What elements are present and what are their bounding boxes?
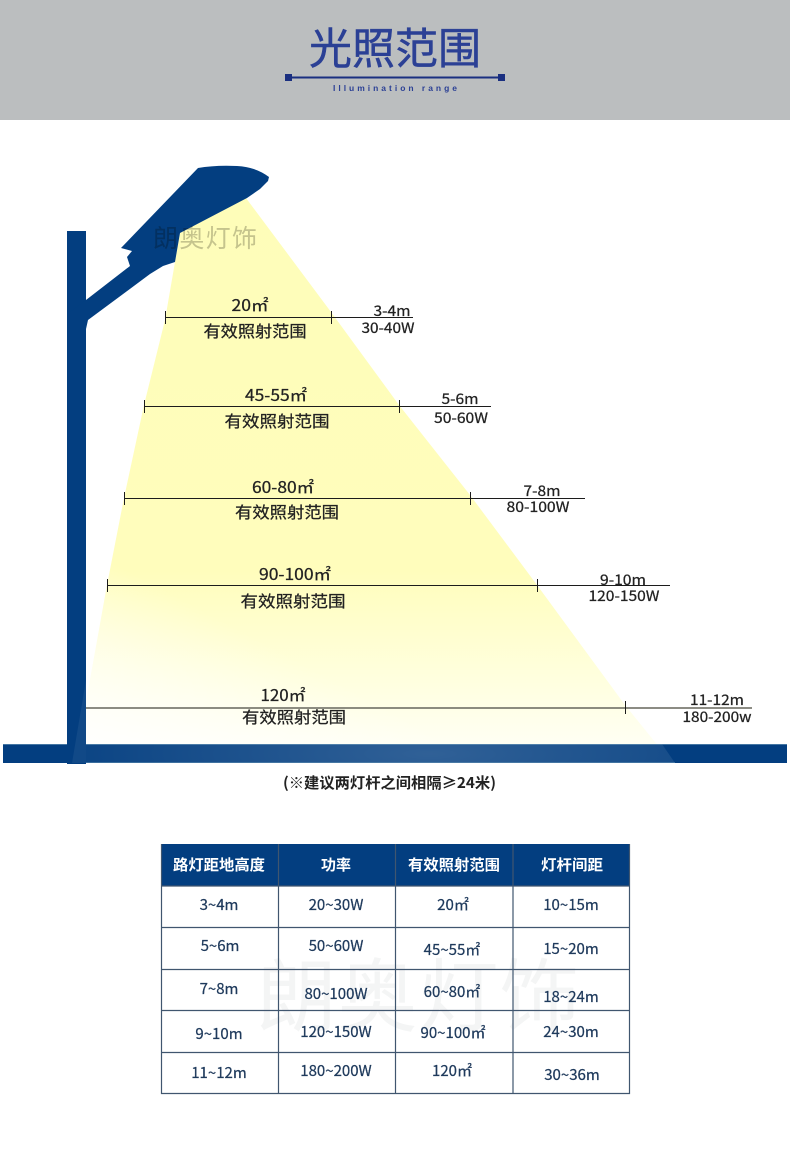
table row: 11~12m bbox=[191, 1060, 600, 1085]
table grid bbox=[161, 844, 630, 1094]
table row: 5~6m: 45~55㎡ bbox=[424, 939, 480, 960]
ground bar bbox=[3, 744, 787, 763]
range row 1: 有效照射范围 bbox=[204, 318, 306, 342]
table row: 7~8m: 7~8m bbox=[200, 978, 238, 999]
table header: 功率 bbox=[321, 854, 351, 875]
range row 5 bbox=[86, 682, 752, 728]
table row: 9~10m: 90~100㎡ bbox=[421, 1022, 485, 1043]
table row: 3~4m: 20~30W bbox=[309, 894, 363, 915]
table header: 路灯距地高度 bbox=[173, 854, 265, 875]
range row 4: 9-10m bbox=[600, 569, 646, 590]
range row 3: 80-100W bbox=[506, 496, 570, 517]
table row: 11~12m: 120㎡ bbox=[432, 1060, 472, 1081]
table row: 7~8m: 80~100W bbox=[304, 983, 368, 1004]
table header: 有效照射范围 bbox=[408, 854, 500, 875]
range row 2: 45-55㎡ bbox=[245, 382, 307, 406]
table row: 7~8m: 60~80㎡ bbox=[424, 981, 480, 1002]
table row: 5~6m bbox=[201, 935, 599, 960]
range row 5: 11-12m bbox=[690, 689, 744, 710]
range row 3: 有效照射范围 bbox=[235, 499, 339, 523]
table row: 11~12m: 11~12m bbox=[191, 1062, 247, 1083]
table row: 9~10m bbox=[195, 1021, 599, 1044]
range row 1: 20㎡ bbox=[232, 292, 268, 316]
table row: 5~6m: 15~20m bbox=[543, 938, 599, 959]
range row 3 bbox=[124, 474, 585, 523]
light beam bbox=[70, 198, 672, 763]
range row 1: 3-4m bbox=[374, 300, 410, 321]
table row: 3~4m: 20㎡ bbox=[437, 894, 469, 915]
table row: 7~8m: 18~24m bbox=[543, 986, 599, 1007]
range row 5: 180-200w bbox=[682, 706, 752, 727]
range row 3: 60-80㎡ bbox=[252, 474, 314, 498]
subtitle: Illumination range bbox=[333, 83, 457, 93]
table header bbox=[161, 844, 630, 886]
table row: 3~4m: 3~4m bbox=[200, 894, 238, 915]
range row 1: 30-40W bbox=[362, 317, 415, 338]
table row: 3~4m: 10~15m bbox=[543, 894, 599, 915]
range row 5: 有效照射范围 bbox=[242, 704, 346, 728]
range row 4: 120-150W bbox=[588, 585, 660, 606]
title: 光照范围 bbox=[309, 15, 481, 77]
lamp arm and head bbox=[70, 166, 269, 338]
table row: 9~10m: 120~150W bbox=[300, 1021, 372, 1042]
range row 4 bbox=[107, 561, 670, 612]
range row 2: 50-60W bbox=[434, 407, 488, 428]
table row: 5~6m: 5~6m bbox=[201, 935, 239, 956]
street lamp bbox=[67, 166, 269, 764]
title underline bbox=[285, 74, 505, 81]
range row 2 bbox=[144, 382, 491, 432]
table row: 9~10m: 9~10m bbox=[195, 1023, 243, 1044]
header band bbox=[0, 0, 790, 120]
table row: 11~12m: 30~36m bbox=[544, 1064, 600, 1085]
range row 2: 有效照射范围 bbox=[224, 408, 330, 432]
table header: 灯杆间距 bbox=[541, 854, 603, 875]
table row: 11~12m: 180~200W bbox=[300, 1060, 372, 1081]
table row: 7~8m bbox=[200, 978, 599, 1007]
range row 3: 7-8m bbox=[524, 480, 560, 501]
table row: 9~10m: 24~30m bbox=[543, 1021, 599, 1042]
table watermark: 朗奥灯饰 bbox=[256, 933, 580, 1049]
table row: 3~4m bbox=[200, 894, 599, 915]
range row 2: 5-6m bbox=[442, 388, 478, 409]
range row 4: 90-100㎡ bbox=[259, 561, 331, 585]
range row 1 bbox=[165, 292, 415, 342]
range row 4: 有效照射范围 bbox=[240, 588, 346, 612]
lamp pole bbox=[67, 231, 86, 764]
spacing note: (※建议两灯杆之间相隔≥24米) bbox=[283, 772, 496, 793]
lamp watermark: 朗奥灯饰 bbox=[153, 219, 257, 255]
specification table bbox=[161, 844, 630, 1094]
table row: 5~6m: 50~60W bbox=[309, 935, 363, 956]
pole light streak bbox=[72, 680, 86, 763]
range row 5: 120㎡ bbox=[260, 682, 306, 706]
